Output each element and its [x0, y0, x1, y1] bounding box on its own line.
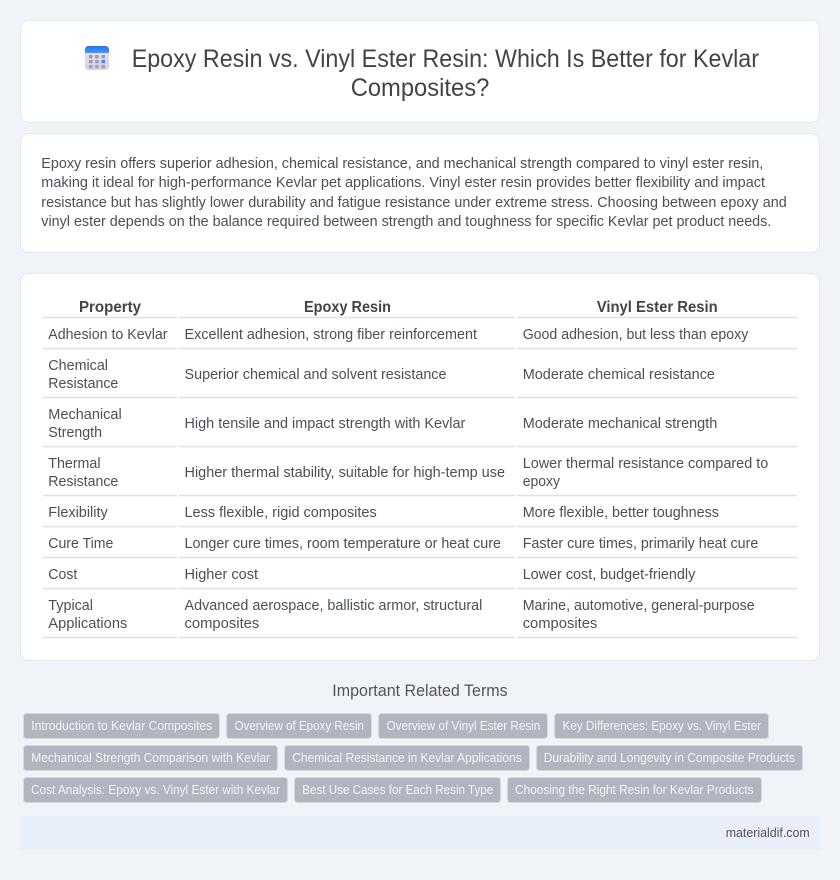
title: [132, 45, 759, 102]
chip: Introduction to Kevlar Composites: [31, 719, 212, 733]
row: thermal resistance: Lower thermal resistance compared to: [523, 456, 768, 472]
chip: Overview of Epoxy Resin: [234, 719, 364, 733]
row: cure time: Faster cure times, primarily heat cure: [523, 536, 758, 552]
row: typical applications: Applications: [48, 616, 127, 632]
row: cost: Cost: [48, 567, 77, 583]
chip: [294, 778, 500, 802]
row: mechanical strength: Strength: [48, 425, 102, 441]
chip: [378, 714, 548, 738]
summary paragraph: vinyl ester depends on the balance required between strength and toughness for specific Kevlar pet product needs.: [41, 214, 771, 230]
panel: summary text: [20, 134, 820, 252]
row: chemical resistance: Moderate chemical resistance: [523, 367, 715, 383]
row: mechanical strength: Mechanical: [48, 407, 122, 423]
chip: Chemical Resistance in Kevlar Applications: [292, 751, 522, 765]
chip: [284, 746, 530, 770]
row: flexibility: More flexible, better toughness: [523, 505, 719, 521]
row: cost: Lower cost, budget-friendly: [523, 567, 696, 583]
chip: Mechanical Strength Comparison with Kevlar: [31, 751, 271, 765]
chip: Cost Analysis: Epoxy vs. Vinyl Ester with Kevlar: [31, 783, 281, 797]
row: typical applications: composites: [184, 616, 259, 632]
row: typical applications: Advanced aerospace, ballistic armor, structural: [184, 598, 482, 614]
row: flexibility: Flexibility: [48, 505, 108, 521]
chip: Key Differences: Epoxy vs. Vinyl Ester: [562, 719, 762, 733]
row: chemical resistance: Resistance: [48, 376, 118, 392]
heading: important related terms: Important Related Terms: [332, 681, 508, 700]
row: flexibility: Less flexible, rigid composites: [184, 505, 377, 521]
row: thermal resistance: Higher thermal stability, suitable for high-temp use: [184, 465, 505, 481]
title: Composites?: [351, 74, 489, 102]
row: cure time: Longer cure times, room temperature or heat cure: [184, 536, 501, 552]
row: thermal resistance: epoxy: [523, 474, 561, 490]
summary paragraph: resistance but has slightly lower durability and fatigue resistance under extreme stress. Choosing between epoxy and: [41, 195, 787, 211]
chip: [536, 746, 802, 770]
row: cure time: [48, 536, 758, 552]
row: flexibility: [48, 505, 719, 521]
row: thermal resistance: [48, 456, 768, 490]
row: adhesion: [48, 327, 749, 343]
chip: Durability and Longevity in Composite Products: [544, 751, 795, 765]
footer bar: [20, 816, 820, 850]
table header row: [79, 299, 718, 316]
table header row: Property: [79, 299, 141, 316]
chip: [226, 714, 372, 738]
row: cure time: Cure Time: [48, 536, 113, 552]
chip: [24, 746, 278, 770]
row: thermal resistance: Resistance: [48, 474, 118, 490]
panel: comparison table: [20, 274, 820, 660]
row: typical applications: [48, 598, 755, 632]
panel: title header: [20, 20, 820, 122]
summary paragraph: making it ideal for high-performance Kevlar pet applications. Vinyl ester resin provides better flexibility and impact: [41, 175, 765, 191]
footer source text: materialdif.com: [726, 825, 810, 840]
table header row: Epoxy Resin: [304, 299, 391, 316]
chip: [24, 714, 220, 738]
row: mechanical strength: [48, 407, 717, 441]
row: adhesion: Excellent adhesion, strong fiber reinforcement: [184, 327, 477, 343]
row: typical applications: Marine, automotive, general-purpose: [523, 598, 755, 614]
chip: Choosing the Right Resin for Kevlar Products: [515, 783, 754, 797]
row: typical applications: Typical: [48, 598, 93, 614]
chip: [554, 714, 768, 738]
row: adhesion: Adhesion to Kevlar: [48, 327, 168, 343]
table header row: Vinyl Ester Resin: [597, 299, 718, 316]
summary paragraph: Epoxy resin offers superior adhesion, chemical resistance, and mechanical strength compared to vinyl ester resin,: [41, 156, 763, 172]
chip: [24, 778, 288, 802]
row: chemical resistance: [48, 358, 715, 392]
chip: Best Use Cases for Each Resin Type: [302, 783, 493, 797]
title: Epoxy Resin vs. Vinyl Ester Resin: Which Is Better for Kevlar: [132, 45, 759, 73]
row: adhesion: Good adhesion, but less than epoxy: [523, 327, 749, 343]
chip: [508, 778, 762, 802]
summary paragraph: [41, 156, 787, 230]
row: typical applications: composites: [523, 616, 597, 632]
row: cost: Higher cost: [184, 567, 258, 583]
related term chips: [24, 714, 802, 802]
row: thermal resistance: Thermal: [48, 456, 100, 472]
row: mechanical strength: Moderate mechanical strength: [523, 416, 717, 432]
icon: calendar: [85, 46, 109, 70]
row: chemical resistance: Superior chemical and solvent resistance: [184, 367, 446, 383]
row: cost: [48, 567, 696, 583]
chip: Overview of Vinyl Ester Resin: [386, 719, 540, 733]
row: chemical resistance: Chemical: [48, 358, 108, 374]
row: mechanical strength: High tensile and impact strength with Kevlar: [184, 416, 465, 432]
